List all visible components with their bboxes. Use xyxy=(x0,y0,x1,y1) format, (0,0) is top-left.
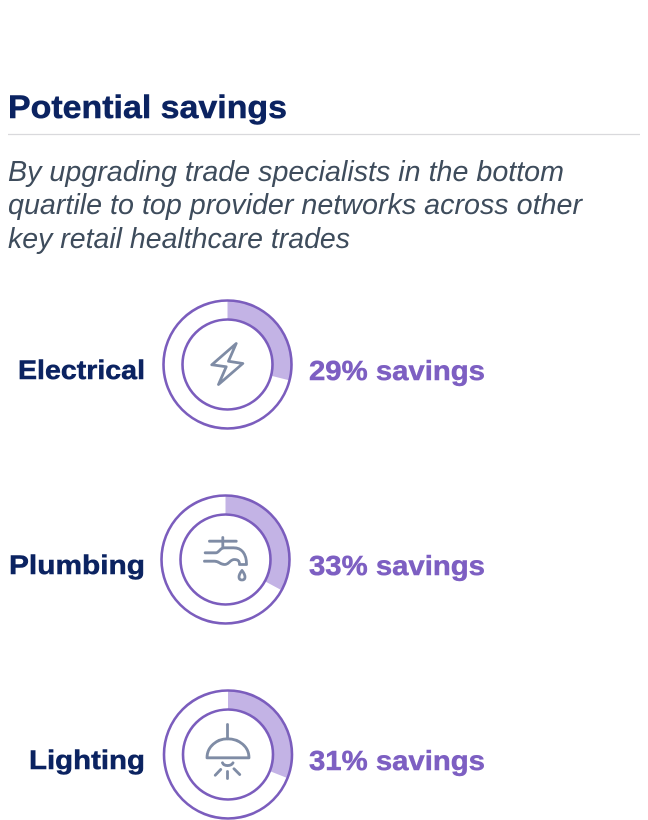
label: Electrical: Electrical xyxy=(18,355,145,385)
donut: 29 percent xyxy=(164,300,292,428)
subtitle text block: key retail healthcare trades xyxy=(8,223,350,255)
panel: electrical xyxy=(18,300,485,428)
label: Lighting: Lighting xyxy=(29,745,145,775)
panel: plumbing xyxy=(9,496,485,624)
icon: water tap xyxy=(204,538,246,580)
value: 31% savings: 31% savings xyxy=(309,745,485,776)
title: Potential savings xyxy=(8,89,287,125)
value: 29% savings: 29% savings xyxy=(309,355,485,386)
subtitle text block: quartile to top provider networks across other xyxy=(8,189,584,221)
value: 33% savings: 33% savings xyxy=(309,550,485,581)
panel: lighting xyxy=(29,690,485,818)
label: Plumbing: Plumbing xyxy=(9,550,145,580)
donut: 33 percent xyxy=(162,496,290,624)
donut: 31 percent xyxy=(164,690,292,818)
icon: lightning bolt xyxy=(212,344,243,384)
subtitle text block xyxy=(8,156,584,255)
icon: ceiling lamp xyxy=(207,724,249,778)
subtitle text block: By upgrading trade specialists in the bottom xyxy=(8,156,564,188)
